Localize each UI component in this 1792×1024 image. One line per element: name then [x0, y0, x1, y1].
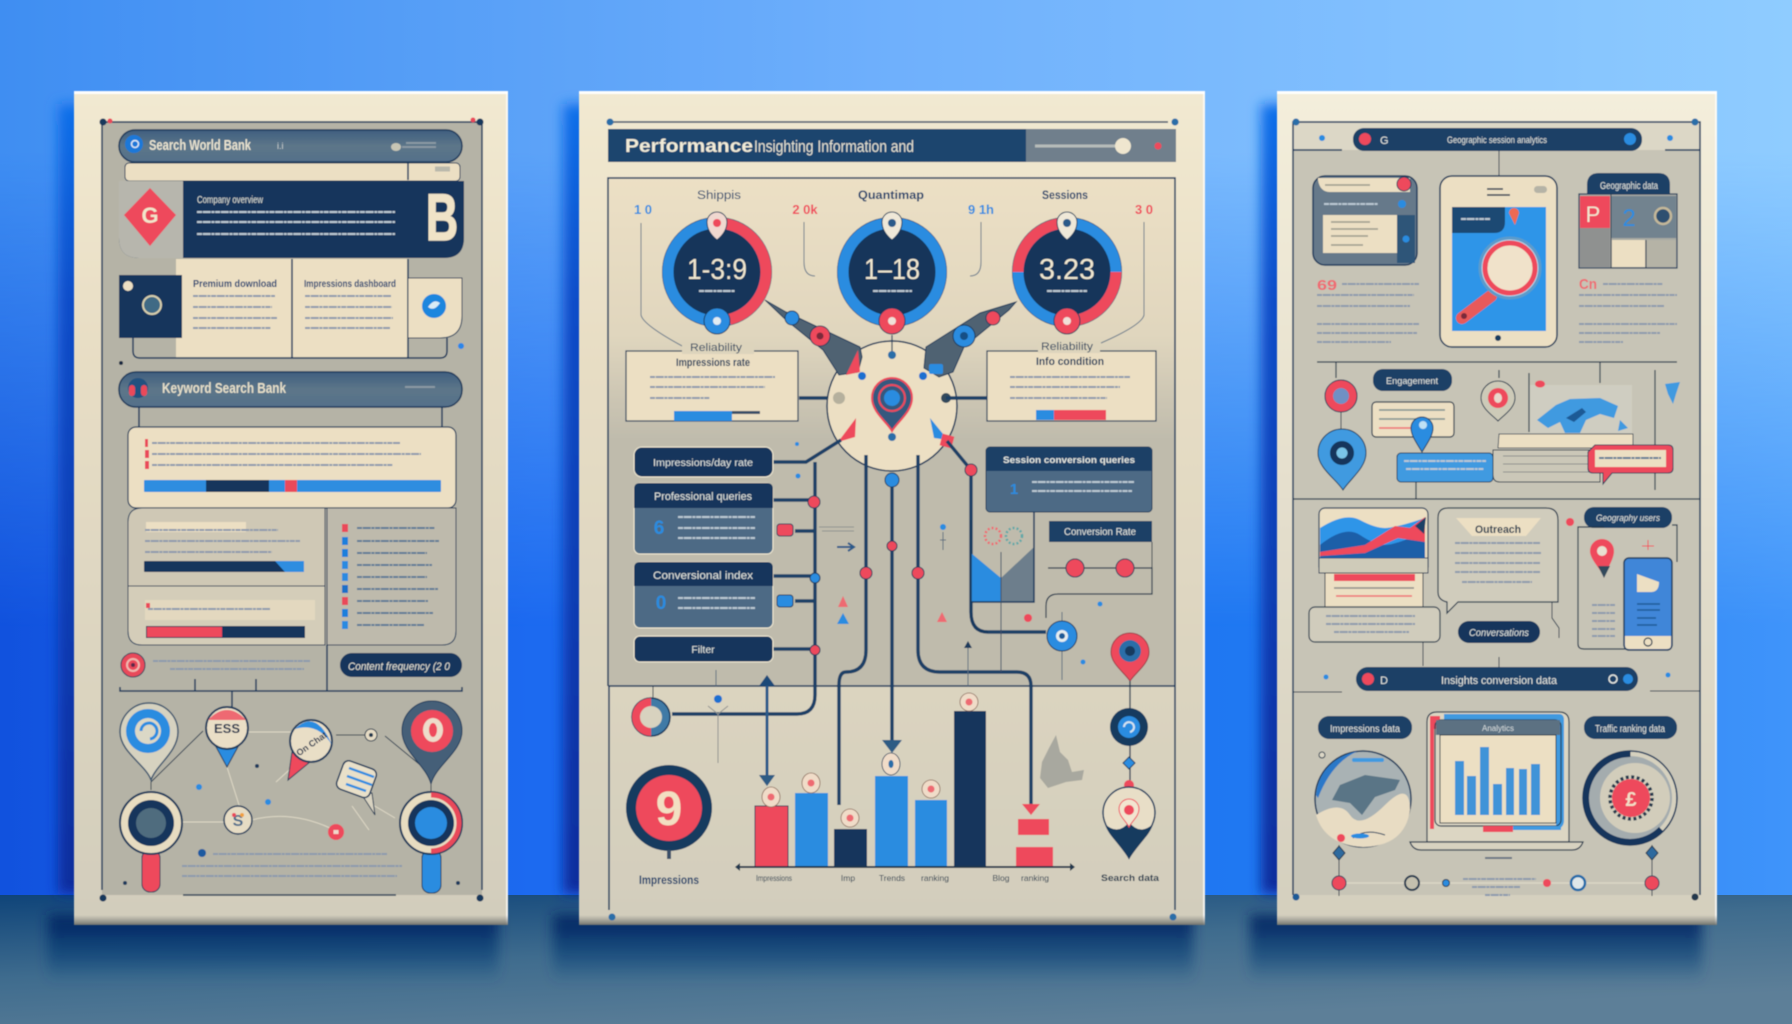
- card: two progress cards: [128, 508, 325, 645]
- envelope chart: [971, 512, 1034, 672]
- card: reliability right: Reliability: [1041, 341, 1094, 353]
- speech card: outreach: Outreach: [1475, 524, 1521, 536]
- panel: left, search world bank: [74, 91, 508, 925]
- dashboard label: conversion rate: Conversion Rate: [1064, 527, 1136, 538]
- text block: left stats: 69: [1317, 277, 1337, 294]
- label pill: impressions: [1318, 716, 1412, 739]
- icon: blue tree marker: [1665, 382, 1680, 404]
- list: nine keyword rows: [327, 508, 456, 645]
- label pill: [1373, 369, 1452, 391]
- dashboard card: status: [986, 447, 1152, 512]
- row: premium and impressions text: Premium download: [193, 278, 277, 290]
- label pill: traffic: [1584, 716, 1677, 739]
- header pill: search world bank: [119, 130, 462, 162]
- button: conversion: Conversations: [1469, 628, 1529, 639]
- scatter markers: [716, 442, 1102, 686]
- icon: blue location pin: [1318, 429, 1366, 490]
- globe: [1315, 751, 1411, 847]
- connector lines: [151, 731, 430, 830]
- icon: colourful node: [224, 806, 252, 834]
- note strip and red speech bubble: [1493, 434, 1673, 484]
- bar labels: Impressions: [756, 873, 792, 883]
- button: content frequency: [340, 653, 462, 677]
- dashboard card: professional queries: 6: [654, 518, 664, 539]
- gauge labels: Quantimap: [858, 190, 924, 202]
- bar chart: [735, 693, 1075, 871]
- section backgrounds: [606, 118, 1178, 920]
- device: tablet with magnifier: [1440, 176, 1557, 347]
- connector network: [672, 398, 1046, 805]
- dashboard label: impression rate: Impressions/day rate: [653, 458, 753, 469]
- header pill: insights: Insights conversion data: [1441, 675, 1558, 687]
- dashboard label: filter: Filter: [691, 644, 715, 656]
- icon: magnifier: [1461, 238, 1540, 319]
- dashboard label: impression rate: [634, 447, 773, 477]
- icon: speech pin with tally: ESS: [214, 721, 240, 736]
- card: reliability right: [987, 341, 1156, 421]
- dashboard card: conversion index: 0: [656, 593, 666, 614]
- dashboard card: professional queries: Professional queries: [654, 491, 752, 503]
- speech card: outreach: [1438, 508, 1559, 638]
- header pill: search world bank: i.i: [277, 141, 284, 151]
- label pill: geography: Geography users: [1596, 513, 1660, 524]
- gauge labels: 9 1h: [968, 202, 994, 217]
- laptop: [1410, 712, 1583, 858]
- cream strip: [125, 163, 460, 181]
- panel: right, geographic analytics: [1277, 91, 1717, 925]
- icon: red location pin: [1111, 633, 1149, 708]
- icon: navy search tile: [119, 275, 182, 338]
- bar labels: [639, 873, 1160, 887]
- donut gauge: £: [1625, 789, 1637, 811]
- gauge 3: 3.23: [1039, 254, 1095, 286]
- text block: right stats: Cn: [1579, 276, 1597, 293]
- dashboard card: professional queries: [634, 483, 773, 554]
- card: reliability right: Info condition: [1036, 356, 1104, 368]
- label pill: geography: [1584, 507, 1672, 528]
- header pill: insights: [1293, 667, 1700, 692]
- hub: [827, 335, 957, 471]
- arrow: double vertical: [759, 675, 775, 786]
- card: keyword lines and progress bar: [128, 427, 456, 508]
- gauge labels: Sessions: [1042, 190, 1088, 202]
- icon: blue swirl pin: [120, 703, 178, 780]
- header pill: keyword search bank: [119, 372, 462, 407]
- gauge 2: 1–18: [864, 254, 920, 286]
- icon: red target: [1325, 380, 1357, 430]
- bar labels: Blog: [992, 873, 1010, 883]
- row: premium and impressions text: Impressions dashboard: [304, 278, 396, 290]
- title bar: performance: [608, 129, 1176, 162]
- footnote text: [182, 849, 402, 895]
- text block: left stats: [1317, 277, 1419, 342]
- card: company overview: Company overview: [197, 194, 263, 206]
- card: company overview: [119, 180, 464, 258]
- panel: centre, performance dashboard: [579, 91, 1205, 925]
- icon: blue magnifier: [400, 792, 462, 893]
- vertical pin stack: [1103, 708, 1155, 858]
- row: premium and impressions text: [119, 259, 462, 358]
- area chart card: [1309, 508, 1440, 666]
- gauge 2: [837, 212, 947, 334]
- world map: [1530, 380, 1632, 433]
- gauge labels: 3 0: [1135, 202, 1153, 217]
- gauge labels: 2 0k: [792, 202, 818, 217]
- dashboard card: conversion index: [634, 562, 773, 628]
- bar value badges: [762, 693, 978, 827]
- icon: tilted chat pin: [288, 720, 332, 780]
- header pill: keyword search bank: Keyword Search Bank: [162, 380, 287, 397]
- header pill: geographic session: G: [1380, 135, 1389, 147]
- icon: red target and caption: [121, 653, 310, 677]
- panel shadows: [48, 104, 1702, 983]
- label pill: traffic: Traffic ranking data: [1595, 724, 1665, 735]
- arm: left connector: [765, 300, 862, 375]
- bar labels: Trends: [879, 873, 905, 883]
- laptop bar chart: [1455, 747, 1540, 815]
- card: geographic data tiles: Geographic data: [1600, 181, 1658, 192]
- card: geographic data tiles: 2: [1622, 205, 1636, 232]
- text block: right stats: [1579, 276, 1677, 342]
- card: reliability left: Impressions rate: [676, 357, 750, 369]
- left section node: [632, 686, 670, 736]
- icon: central pin: [872, 378, 912, 431]
- bottom timeline: [1332, 845, 1659, 896]
- icon: blue circle: [422, 294, 446, 318]
- icon: red diamond G: [124, 188, 176, 246]
- header pill: insights: D: [1380, 675, 1388, 687]
- network nodes: [777, 464, 977, 655]
- button: conversion: [1458, 621, 1540, 667]
- card: browser window: [1313, 176, 1417, 265]
- corner markers: [100, 118, 484, 902]
- header pill: geographic session: [1353, 128, 1642, 176]
- gauge labels: [634, 190, 1153, 217]
- dashboard card: status: 1: [1010, 481, 1018, 498]
- bar labels: ranking: [921, 873, 949, 883]
- big number 9: [626, 765, 712, 859]
- icon: blue target node: [1047, 621, 1077, 651]
- bar labels: ranking: [1021, 873, 1049, 883]
- card: reliability left: Reliability: [690, 342, 743, 354]
- gauge 1: 1-3:9: [687, 254, 747, 286]
- inner frame: [1292, 118, 1700, 900]
- rate nodes: [1046, 542, 1152, 618]
- small fork: [708, 695, 728, 763]
- dashboard card: status: Session conversion queries: [1003, 455, 1135, 466]
- blue note: [1397, 453, 1493, 482]
- icon: tilted chat pin: On Chat: [294, 730, 329, 758]
- button: content frequency: Content frequency (2 0: [348, 661, 451, 673]
- icon: speech pin with tally: [206, 707, 248, 767]
- icon: slate magnifier with red handle: [120, 792, 182, 892]
- gauge labels: Shippis: [697, 190, 741, 202]
- card: mobile device: [1578, 525, 1677, 650]
- text box with pin: [1372, 402, 1454, 452]
- icon: red diamond G: G: [141, 203, 159, 228]
- arm: right connector: [924, 302, 1016, 377]
- icon: red target pin: [1481, 381, 1515, 421]
- title bar: performance: Performance: [625, 136, 753, 156]
- gauge 1: [662, 212, 772, 334]
- icon: colourful node: S: [233, 813, 244, 830]
- label pill: impressions: Impressions data: [1330, 724, 1400, 735]
- icon: red dot node: [328, 824, 344, 840]
- card: company overview: B: [426, 180, 458, 254]
- header pill: geographic session: Geographic session analytics: [1447, 135, 1547, 146]
- card: geographic data tiles: [1579, 173, 1677, 268]
- bar labels: Imp: [841, 873, 855, 883]
- bar labels: Search data: [1101, 873, 1160, 884]
- big number 9: 9: [656, 783, 682, 836]
- laptop: Analytics: [1482, 724, 1514, 733]
- header pill: search world bank: Search World Bank: [149, 137, 251, 154]
- icon: chat bubble: [335, 759, 378, 815]
- gauge 3: [1012, 212, 1122, 334]
- bar labels: Impressions: [639, 873, 699, 887]
- title bar: performance: Insighting Information and: [754, 137, 914, 156]
- map silhouette: [1040, 735, 1084, 788]
- donut gauge: [1568, 736, 1692, 860]
- card: reliability left: [626, 342, 798, 421]
- dashboard card: conversion index: Conversional index: [653, 570, 754, 582]
- icon: red O pin: [402, 701, 462, 784]
- dashboard label: conversion rate: [1049, 521, 1152, 542]
- gauge labels: 1 0: [634, 202, 652, 217]
- card: geographic data tiles: P: [1586, 202, 1600, 227]
- label pill: Engagement: [1386, 376, 1438, 387]
- dashboard label: filter: [634, 636, 773, 662]
